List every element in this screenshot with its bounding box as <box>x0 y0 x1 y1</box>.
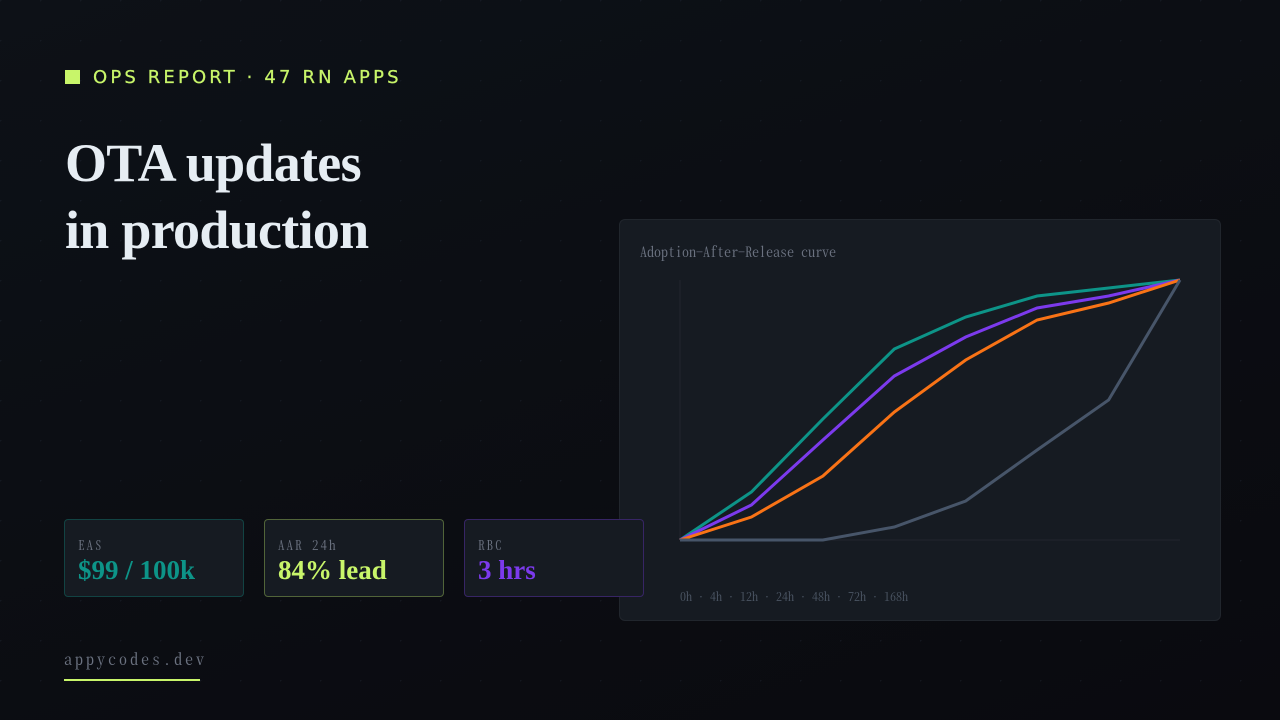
series: purple <box>680 280 1180 540</box>
label: EAS <box>78 535 104 554</box>
x axis labels: 0h · 4h · 12h · 24h · 48h · 72h · 168h <box>680 588 908 605</box>
label: AAR 24h <box>278 535 338 554</box>
eyebrow label <box>65 67 402 88</box>
panel: adoption chart <box>619 219 1221 621</box>
series: orange <box>680 280 1180 540</box>
footer brand: appycodes.dev <box>64 647 207 670</box>
footer underline <box>64 679 200 681</box>
title: OTA updates <box>65 133 361 193</box>
title: in production <box>65 200 369 260</box>
line chart <box>679 278 1182 605</box>
eyebrow text: OPS REPORT · 47 RN APPS <box>93 67 402 88</box>
icon: square bullet <box>65 70 80 84</box>
stat card: AAR <box>264 519 444 597</box>
stat card: RBC <box>464 519 644 597</box>
series: gray <box>680 280 1180 540</box>
value: 3 hrs <box>478 555 536 585</box>
stat card: EAS <box>64 519 244 597</box>
value: $99 / 100k <box>78 555 195 585</box>
label: RBC <box>478 535 504 554</box>
value: 84% lead <box>278 555 387 585</box>
series: teal <box>680 280 1180 540</box>
title <box>65 133 369 260</box>
chart title: Adoption-After-Release curve <box>640 242 836 262</box>
